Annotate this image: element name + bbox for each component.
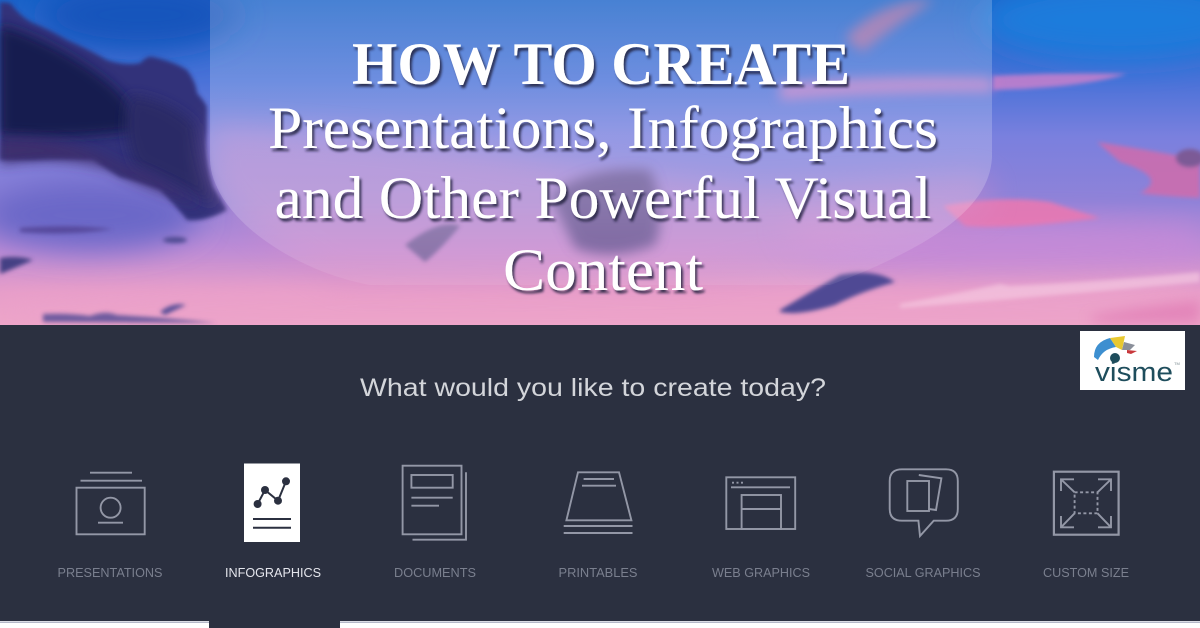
- bottom white strip with tab gap: [0, 621, 1200, 628]
- label: social graphics: SOCIAL GRAPHICS: [866, 565, 981, 580]
- pink streak and clouds under title panel: [780, 77, 993, 100]
- title: [268, 31, 938, 303]
- icon: visme logo: TM: [1174, 361, 1180, 366]
- icon: presentations: [76, 473, 145, 534]
- label: printables: PRINTABLES: [558, 565, 638, 580]
- translucent title panel: [210, 0, 992, 285]
- prompt heading: What would you like to create today?: [360, 374, 826, 402]
- icon: documents: [403, 466, 466, 540]
- pink streaks, right: [993, 73, 1127, 90]
- icon: visme logo: visme: [1095, 357, 1173, 387]
- icon: visme logo: [1080, 331, 1185, 390]
- icon: social graphics: [890, 469, 958, 536]
- icon: printables: [564, 472, 632, 533]
- icon: web graphics: [726, 477, 795, 529]
- label: presentations: PRESENTATIONS: [58, 565, 163, 580]
- cloud wisps, horizon: [43, 313, 217, 323]
- title: Content: [503, 237, 703, 303]
- title: and Other Powerful Visual: [274, 165, 932, 231]
- sky background: [0, 0, 1200, 325]
- label: web graphics: WEB GRAPHICS: [712, 565, 810, 580]
- label: infographics: INFOGRAPHICS: [225, 565, 321, 580]
- icon: infographics: [244, 464, 300, 542]
- icon: custom size: [1054, 472, 1119, 535]
- label: documents: DOCUMENTS: [394, 565, 476, 580]
- title: Presentations, Infographics: [268, 95, 938, 161]
- dark lower panel: [0, 325, 1200, 628]
- title: HOW TO CREATE: [352, 31, 850, 97]
- label: custom size: CUSTOM SIZE: [1043, 565, 1129, 580]
- dark cloud, left: [0, 2, 227, 220]
